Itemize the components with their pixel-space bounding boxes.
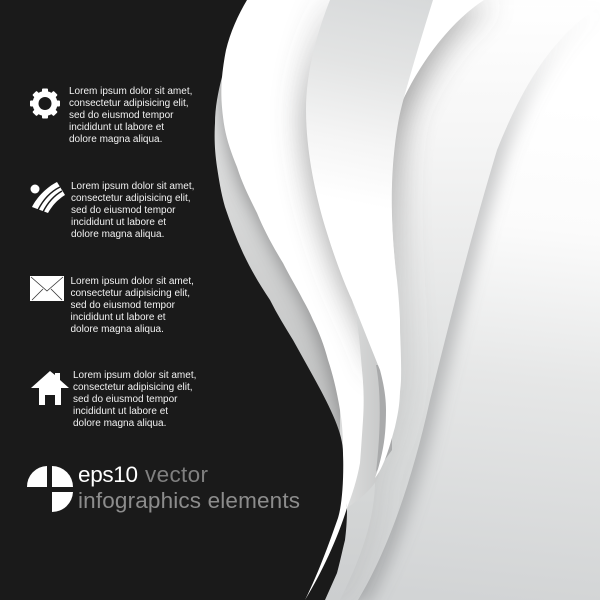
title line 1: eps10 bbox=[78, 462, 138, 487]
item 3 text: incididunt ut labore et bbox=[70, 312, 166, 323]
item 4 text: sed do eiusmod tempor bbox=[73, 394, 178, 405]
curved layer: white sheet one bbox=[221, 0, 364, 508]
item 3 text: sed do eiusmod tempor bbox=[70, 300, 176, 311]
item 2 text: incididunt ut labore et bbox=[71, 217, 166, 228]
item 2 text: Lorem ipsum dolor sit amet, bbox=[71, 181, 194, 192]
item 4 text: incididunt ut labore et bbox=[73, 406, 168, 417]
item 3 text: Lorem ipsum dolor sit amet, bbox=[70, 276, 194, 287]
item 2 text: sed do eiusmod tempor bbox=[71, 205, 176, 216]
item 3 icon: envelope bbox=[30, 276, 64, 301]
item 2 text: consectetur adipisicing elit, bbox=[71, 193, 191, 204]
curved layer: white wedge and lower band bbox=[300, 0, 493, 600]
logo: quarter circles bbox=[27, 466, 73, 512]
item 2 icon: satellite signal bbox=[30, 182, 65, 213]
item 4 icon: house bbox=[31, 371, 69, 405]
item 1 icon: gear bbox=[30, 88, 60, 118]
title line 2: infographics elements bbox=[78, 488, 300, 513]
item 2 text: dolore magna aliqua. bbox=[71, 229, 164, 240]
title line 1: vector bbox=[145, 462, 208, 487]
item 4 text: consectetur adipisicing elit, bbox=[73, 382, 193, 393]
item 1 text: incididunt ut labore et bbox=[69, 122, 164, 133]
curved layer: shaded fold bbox=[340, 280, 392, 508]
item 1 text: consectetur adipisicing elit, bbox=[69, 98, 189, 109]
white sliver bbox=[305, 450, 347, 600]
item 1 text: Lorem ipsum dolor sit amet, bbox=[69, 86, 192, 97]
curved layer: left gray sheet bbox=[214, 74, 340, 434]
item 1 text: dolore magna aliqua. bbox=[69, 134, 162, 145]
item 4 text: dolore magna aliqua. bbox=[73, 418, 166, 429]
item 4 text: Lorem ipsum dolor sit amet, bbox=[73, 370, 196, 381]
item 1 text: sed do eiusmod tempor bbox=[69, 110, 174, 121]
item 3 text: dolore magna aliqua. bbox=[70, 324, 164, 335]
item 3 text: consectetur adipisicing elit, bbox=[70, 288, 190, 299]
black panel bbox=[0, 0, 347, 600]
curved layer: sheet two bbox=[306, 0, 433, 478]
